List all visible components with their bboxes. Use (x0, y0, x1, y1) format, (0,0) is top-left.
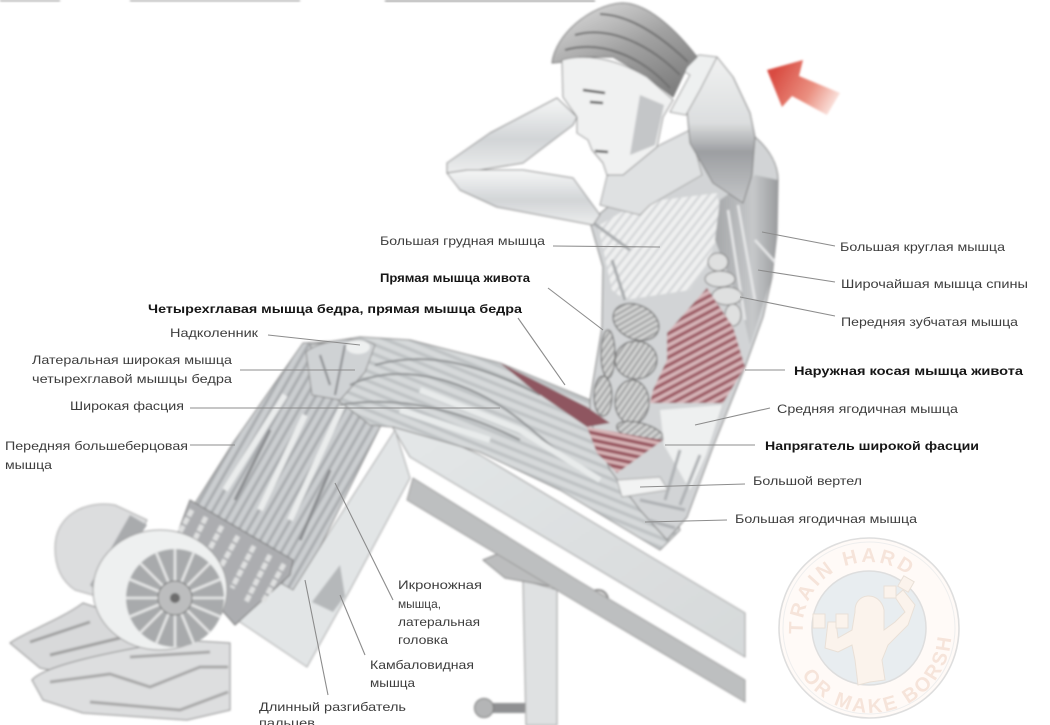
label: extensor digitorum: Длинный разгибатель (259, 700, 406, 714)
shoes (10, 603, 230, 720)
serratus (705, 253, 742, 326)
patella (346, 340, 370, 354)
latissimus and teres (715, 175, 778, 345)
board shaded wedge (312, 565, 345, 612)
pectoral (598, 193, 723, 300)
external oblique (650, 288, 745, 403)
bench lower frame (407, 478, 745, 702)
illustration: athlete on incline bench (10, 3, 778, 725)
trochanter (617, 477, 668, 497)
label: gluteus maximus: Большая ягодичная мышца (735, 512, 917, 526)
label: tibialis line 2: мышца (5, 458, 52, 472)
strap beads (180, 510, 284, 604)
bench post (474, 553, 608, 725)
forearm (447, 98, 577, 173)
label: serratus: Передняя зубчатая мышца (841, 315, 1018, 329)
torso (500, 137, 778, 540)
calf shadows (235, 430, 330, 540)
thigh highlights (400, 390, 600, 480)
back fibres (728, 205, 775, 320)
label: soleus line 2: мышца (370, 676, 415, 690)
arrow (767, 60, 840, 115)
label: rectus abdominis: Прямая мышца живота (380, 271, 530, 285)
badge text: bottom: OR MAKE BORSH (804, 637, 952, 713)
label: external oblique: Наружная косая мышца живота (794, 364, 1023, 378)
label: vastus lateralis line 2: четырехглавой мышцы бедра (32, 372, 232, 386)
shin support board (237, 430, 410, 667)
bench (237, 420, 745, 725)
face (562, 57, 673, 175)
hand behind head (668, 55, 717, 115)
gluteus medius (660, 405, 722, 490)
label: quadriceps: Четырехглавая мышца бедра, прямая мышца бедра (148, 302, 522, 316)
knee (306, 340, 375, 400)
hair (552, 3, 697, 97)
label: tibialis anterior: Передняя большеберцовая (5, 439, 188, 453)
roller fins (126, 549, 224, 647)
logo badge (778, 537, 960, 719)
front roller (93, 530, 227, 650)
ankle straps (177, 500, 293, 625)
rear shoe (10, 603, 150, 680)
labels (5, 234, 1028, 725)
thigh tendons (340, 359, 580, 470)
shin and calf (180, 340, 395, 590)
badge ring text (788, 548, 952, 713)
bench seat slab (393, 420, 745, 657)
label: pectoralis: Большая грудная мышца (380, 234, 545, 248)
hair strands (565, 14, 688, 88)
cropped heading fragment (0, 0, 595, 2)
label: gastrocnemius line 2: мышца, (398, 597, 441, 611)
roller hub (158, 581, 192, 615)
lower leg (177, 340, 395, 625)
label: fascia lata: Широкая фасция (70, 399, 184, 413)
rectus abdominis (594, 296, 666, 447)
front shoe (32, 640, 230, 720)
label: vastus lateralis: Латеральная широкая мышца (32, 353, 232, 367)
label: patella: Надколенник (170, 326, 259, 340)
rectus femoris (500, 363, 610, 427)
pointer lines (190, 232, 835, 695)
badge text: top: TRAIN HARD (788, 548, 912, 634)
head (552, 3, 697, 175)
left chest tendons (592, 222, 630, 300)
upper arm (447, 170, 600, 225)
gluteus maximus fibres (640, 450, 700, 528)
label: tensor fasciae latae: Напрягатель широкой фасции (765, 439, 979, 453)
label: latissimus: Широчайшая мышца спины (841, 277, 1028, 291)
label: gluteus medius: Средняя ягодичная мышца (777, 402, 958, 416)
label: greater trochanter: Большой вертел (753, 474, 862, 488)
tensor fasciae latae (587, 427, 663, 473)
face shading (630, 95, 664, 155)
shin lit highlights (225, 395, 345, 520)
label: gastrocnemius line 3: латеральная (398, 615, 480, 629)
label: teres major: Большая круглая мышца (840, 240, 1005, 254)
label: gastrocnemius: Икроножная (398, 578, 482, 592)
eye, brow and mouth (583, 90, 608, 152)
thigh and hip (306, 337, 680, 550)
raised arm (near) (447, 98, 600, 225)
label: gastrocnemius line 4: головка (398, 633, 448, 647)
label: soleus: Камбаловидная (370, 658, 474, 672)
rear roller (55, 504, 147, 600)
badge figure (813, 576, 915, 685)
badge centre (812, 571, 926, 685)
raised arm (far) (668, 55, 755, 203)
neck and collar (600, 130, 702, 215)
